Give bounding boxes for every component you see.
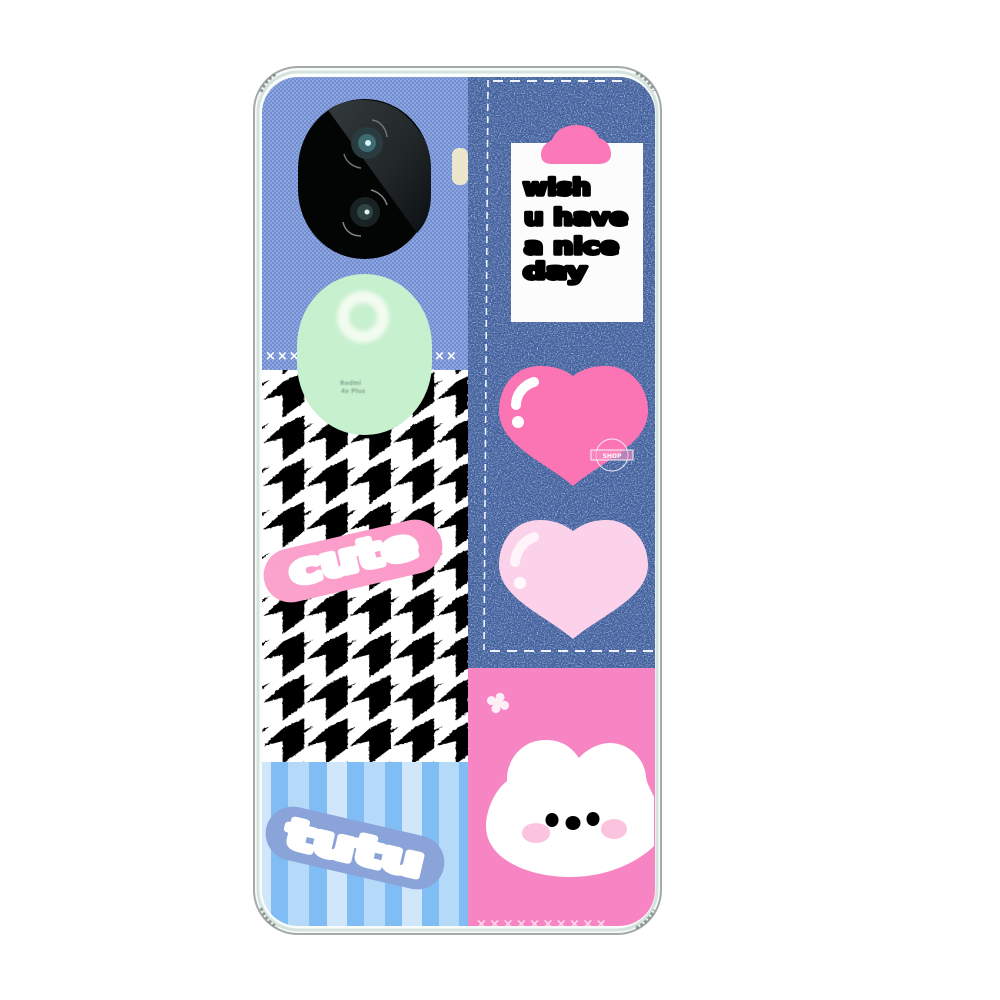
sticker: tutu: [260, 801, 450, 895]
panel: blue stripes: [262, 762, 468, 926]
icon: pink heart: [499, 366, 648, 486]
panel: houndstooth: [262, 370, 468, 762]
sticker: cute: [258, 514, 448, 608]
sticker: tutu: tutu: [281, 811, 428, 887]
watermark stamp: [591, 439, 633, 471]
light ring: [343, 297, 383, 337]
note text: a nice: [524, 234, 619, 260]
green pill: [297, 274, 432, 435]
green module: [297, 274, 432, 435]
icon: pale pink heart: [499, 520, 648, 639]
paper: [511, 143, 643, 322]
flash: [452, 148, 468, 185]
stitching: cross marks right: ××: [434, 349, 458, 364]
cheeks: [522, 819, 627, 843]
stitching: dashed pocket outline: [484, 80, 655, 651]
note text: day: [523, 259, 587, 285]
camera base: [298, 99, 431, 259]
sticker: cute: cute: [285, 521, 422, 595]
bunny face: [486, 740, 654, 877]
lens lower: [343, 190, 387, 236]
watermark stamp: SHOP: [603, 453, 622, 460]
lens upper: [344, 120, 387, 168]
stitching: cross marks left: ×××: [265, 349, 301, 364]
panel: dark denim: [468, 77, 655, 668]
camera module: [298, 99, 431, 259]
panel: light denim: [262, 77, 468, 370]
note text: u have: [524, 205, 628, 231]
module label: 4x Plus: [341, 388, 366, 395]
icon: small white flower: [484, 689, 512, 717]
panel: pink fabric: [468, 668, 655, 926]
note text: wish: [523, 175, 591, 201]
note text: [523, 175, 628, 285]
icon: pink cloud clip: [541, 125, 611, 164]
module label: [340, 380, 366, 395]
stitching: cross marks bottom: ××××××××××: [476, 917, 609, 932]
module label: Redmi: [340, 380, 361, 387]
eyes and nose: [546, 812, 600, 830]
glass reflection: [328, 100, 431, 233]
corner reinforcements: [261, 73, 654, 928]
case back panels: [262, 77, 655, 932]
bunny head: [486, 740, 654, 877]
note card: [511, 125, 643, 322]
phone case bumper: [254, 67, 661, 934]
